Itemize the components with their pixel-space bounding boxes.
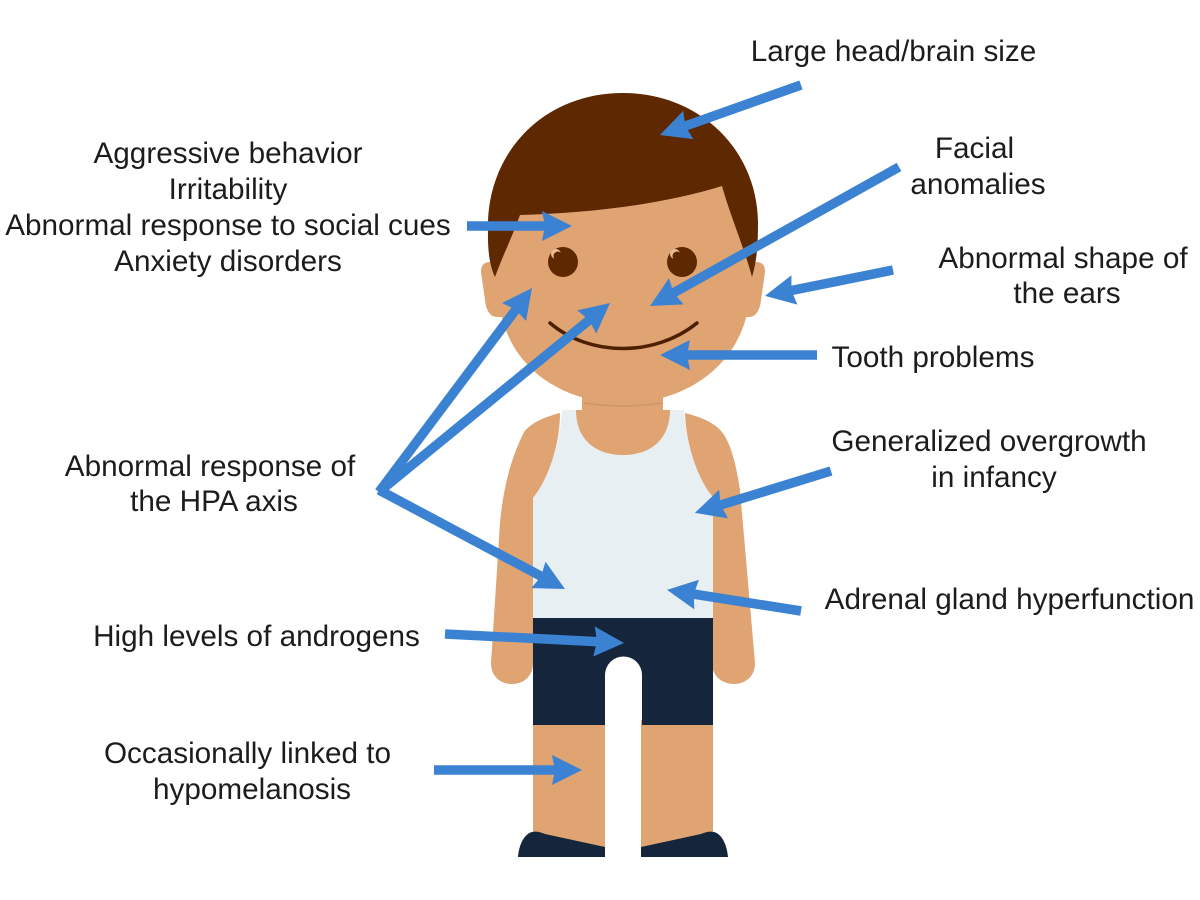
arrow: behavior <box>467 221 552 231</box>
label: teeth: Tooth problems <box>832 341 1034 374</box>
arrow: overgrowth <box>714 471 831 507</box>
arrow: facial <box>668 167 899 296</box>
label: behavior: Anxiety disorders <box>114 245 342 278</box>
left arm <box>491 413 560 684</box>
arrow: androgens <box>445 634 604 642</box>
label: facial: anomalies <box>910 168 1046 201</box>
figure: boy <box>481 93 765 857</box>
label: overgrowth: Generalized overgrowth <box>831 425 1147 458</box>
label: behavior: Irritability <box>169 173 288 206</box>
label: head: Large head/brain size <box>751 35 1036 68</box>
label: ears: the ears <box>1013 277 1121 310</box>
arrow: hypomelanosis <box>434 765 562 775</box>
arrow: head <box>679 85 801 128</box>
label: hypomelanosis: Occasionally linked to <box>104 737 391 770</box>
label: behavior: Abnormal response to social cues <box>5 209 451 242</box>
label: overgrowth: in infancy <box>931 461 1057 494</box>
ears <box>481 262 765 317</box>
shirt <box>533 410 713 618</box>
label: HPA <box>65 450 356 518</box>
chin shadow <box>584 403 662 406</box>
arrow: teeth <box>680 350 817 360</box>
label: overgrowth <box>831 425 1147 494</box>
label: ears <box>938 242 1188 310</box>
legs <box>533 720 713 850</box>
label: androgens: High levels of androgens <box>93 620 420 653</box>
neck <box>576 395 670 455</box>
label: facial: Facial <box>935 132 1014 165</box>
arrow: ears <box>785 270 893 292</box>
arrow: adrenal <box>687 593 801 611</box>
shoes <box>518 832 728 857</box>
hair <box>488 93 758 277</box>
label: ears: Abnormal shape of <box>938 242 1188 275</box>
label: facial <box>910 132 1046 201</box>
label: hypomelanosis: hypomelanosis <box>153 773 351 806</box>
shorts <box>533 618 713 725</box>
label: HPA: Abnormal response of <box>65 450 356 483</box>
label: adrenal: Adrenal gland hyperfunction <box>825 583 1194 616</box>
head <box>497 170 750 403</box>
arrow: HPA to torso <box>379 490 547 580</box>
right arm <box>685 413 755 684</box>
eyes <box>548 247 697 277</box>
label: HPA: the HPA axis <box>130 485 298 518</box>
arrow: HPA to cheek <box>379 304 520 492</box>
label: behavior: Aggressive behavior <box>94 137 363 170</box>
label: hypomelanosis <box>104 737 391 806</box>
label: behavior <box>5 137 451 278</box>
smile <box>550 323 697 348</box>
arrow: HPA to face <box>379 316 594 492</box>
